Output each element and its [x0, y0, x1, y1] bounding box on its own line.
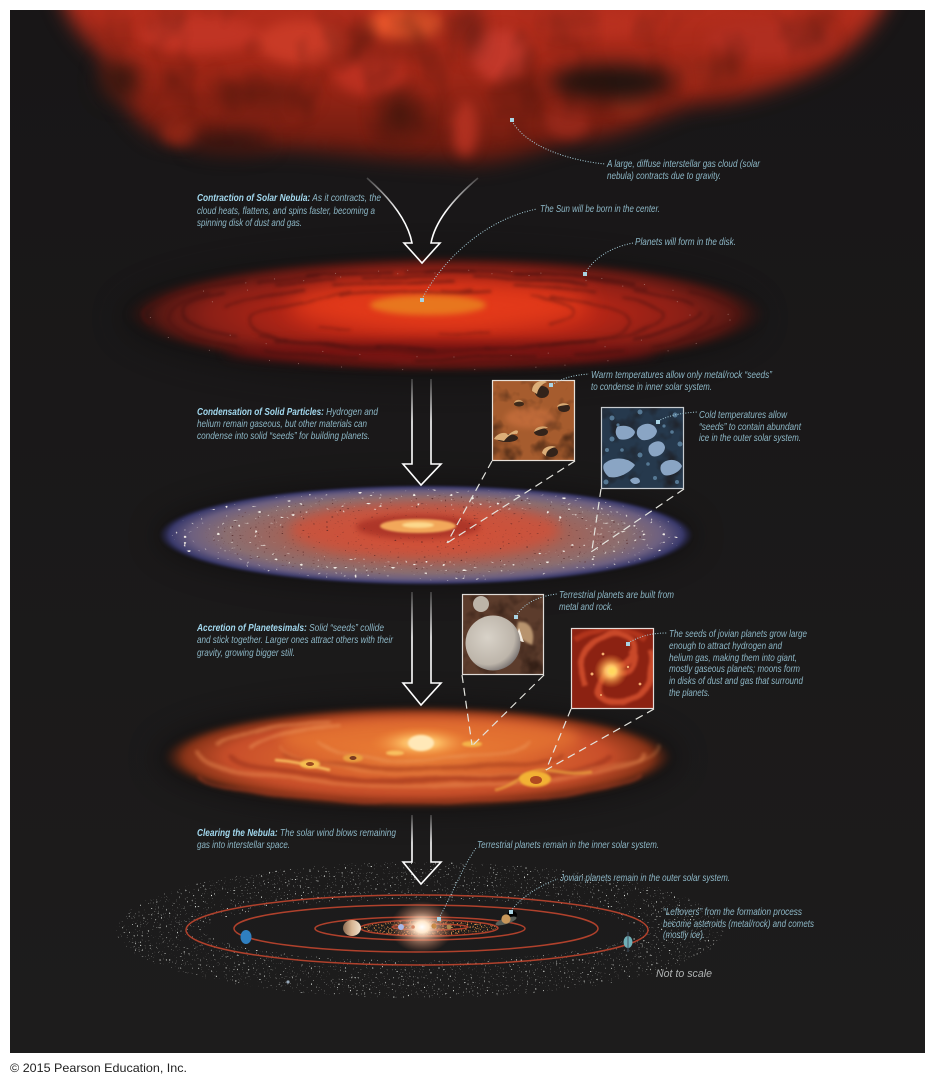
shadow halo behind disk one: [120, 254, 760, 382]
text block: contraction of solar nebula: spinning disk of dust and gas.: [197, 218, 302, 229]
disk faint specks: [150, 270, 730, 370]
text block: clearing the nebula: [197, 828, 396, 851]
copyright: © 2015 Pearson Education, Inc.: [10, 1061, 187, 1075]
leader: gas cloud: [510, 118, 605, 164]
text block: contraction of solar nebula: Contraction of Solar Nebula: As it contracts, the: [197, 193, 381, 204]
caption: leftovers: [663, 907, 814, 941]
text block: condensation of solid particles: Condensation of Solid Particles: Hydrogen and: [197, 407, 378, 418]
leader: jovian seeds: [626, 633, 667, 646]
leader: jovian remain: [509, 879, 558, 914]
leader: terrestrial remain: [437, 848, 476, 921]
inner planets: [398, 923, 451, 930]
inset: cold icy seeds: [601, 407, 684, 489]
text block: accretion of planetesimals: and stick together. Larger ones attract others with their: [197, 635, 393, 646]
text block: contraction of solar nebula: [197, 193, 381, 229]
text block: accretion of planetesimals: gravity, growing bigger still.: [197, 648, 295, 659]
zoom lines: terrestrial inset: [462, 675, 544, 746]
central glow: [369, 726, 473, 760]
inner asteroid belt: [360, 920, 498, 936]
illustration: cleared solar system: [116, 862, 724, 998]
planet: uranus: [624, 932, 632, 952]
planet: neptune: [240, 930, 252, 944]
asteroid and comet scatter: [116, 862, 724, 998]
illustration: diffuse interstellar gas cloud: [58, 0, 892, 163]
text block: clearing the nebula: Clearing the Nebula: The solar wind blows remaining: [197, 828, 396, 839]
note: not to scale: Not to scale: [656, 968, 712, 980]
protoplanet spot left: [275, 760, 330, 770]
leader: terrestrial planets: [514, 594, 557, 619]
zoom lines: jovian inset: [546, 709, 654, 770]
zoom lines: warm inset: [447, 461, 575, 543]
caption: terrestrial planets: Terrestrial planets are built from: [559, 590, 674, 601]
impact plume: [516, 622, 533, 645]
ring bands: [196, 722, 660, 801]
inset: warm metal rock seeds: [492, 380, 575, 461]
illustration: disk with accreting planetesimals: [164, 707, 672, 807]
terrestrial protoplanet spot: [386, 741, 482, 756]
caption: cold seeds: “seeds” to contain abundant: [699, 422, 802, 433]
shadow halo behind disk two: [156, 482, 696, 590]
jovian protoplanet spot: [495, 770, 592, 790]
text block: condensation of solid particles: helium remain gaseous, but other materials can: [197, 419, 367, 430]
white seed dots: [168, 489, 684, 581]
large rocky body: [466, 616, 520, 670]
arrow: accretion: [403, 592, 441, 705]
caption: jovian planets: mostly gaseous planets; moons form: [669, 664, 800, 675]
text block: condensation of solid particles: condense into solid “seeds” for building planets.: [197, 431, 370, 442]
spiral arms: [575, 629, 652, 702]
planet orbits: [186, 895, 648, 965]
cloud dark pockets: [100, 4, 674, 152]
caption: planets in disk: Planets will form in the disk.: [635, 237, 736, 248]
shadow halo behind disk three: [156, 702, 680, 814]
caption: leftovers: (mostly ice).: [663, 930, 705, 941]
inset: terrestrial planetesimals: [462, 594, 544, 675]
caption: warm seeds: Warm temperatures allow only metal/rock “seeds”: [591, 370, 772, 381]
cloud bright billows: [140, 8, 835, 156]
caption: jovian planets: The seeds of jovian planets grow large: [669, 629, 807, 640]
illustration: disk with condensing seeds: [159, 485, 693, 585]
leader: planets in disk: [583, 243, 633, 276]
comet dot: [286, 980, 290, 984]
planet: jupiter: [343, 920, 361, 936]
sun: [390, 901, 454, 953]
text block: contraction of solar nebula: cloud heats, flattens, and spins faster, becoming a: [197, 206, 375, 217]
ice rocks: [603, 424, 682, 484]
protoplanet spot centre left: [343, 754, 363, 762]
dark dust specks: [205, 495, 645, 575]
caption: warm seeds: [591, 370, 772, 393]
text block: condensation of solid particles: [197, 407, 378, 442]
arrow: contraction: [367, 178, 478, 263]
caption: gas cloud: nebula) contracts due to gravity.: [607, 171, 721, 182]
caption: terrestrial planets: [559, 590, 674, 613]
ice droplets: [604, 410, 682, 484]
rock seeds: [494, 381, 570, 457]
caption: jovian planets: in disks of dust and gas that surround: [669, 676, 803, 687]
arrow: clearing: [403, 815, 441, 884]
caption: jovian remain: Jovian planets remain in the outer solar system.: [559, 873, 730, 884]
caption: terrestrial remain: Terrestrial planets remain in the inner solar system.: [477, 840, 659, 851]
caption: gas cloud: A large, diffuse interstellar gas cloud (solar: [606, 159, 760, 170]
caption: sun: The Sun will be born in the center.: [540, 204, 660, 215]
caption: jovian planets: [669, 629, 807, 699]
text block: accretion of planetesimals: [196, 623, 393, 659]
caption: leftovers: become asteroids (metal/rock) and comets: [663, 919, 814, 930]
text block: clearing the nebula: gas into interstellar space.: [197, 840, 290, 851]
caption: terrestrial planets: metal and rock.: [559, 602, 613, 613]
caption: jovian planets: enough to attract hydrogen and: [669, 641, 782, 652]
leader: warm seeds: [549, 374, 589, 387]
small rocky body: [473, 596, 489, 612]
planet: saturn: [495, 911, 517, 927]
illustration: contracting disk: [126, 256, 766, 372]
arrow: condensation: [403, 379, 441, 485]
caption: cold seeds: ice in the outer solar system.: [699, 433, 801, 444]
caption: leftovers: “Leftovers” from the formation process: [663, 907, 802, 918]
caption: cold seeds: Cold temperatures allow: [699, 410, 788, 421]
caption: warm seeds: to condense in inner solar system.: [591, 382, 712, 393]
caption: jovian planets: helium gas, making them into giant,: [669, 653, 797, 664]
inset: jovian protoplanet swirl: [571, 628, 654, 709]
leader: sun: [420, 209, 537, 302]
caption: jovian planets: the planets.: [669, 688, 710, 699]
text block: accretion of planetesimals: Accretion of Planetesimals: Solid “seeds” collide: [196, 623, 384, 634]
leader: cold seeds: [656, 412, 697, 424]
caption: cold seeds: [699, 410, 802, 444]
disk dark spiral bands: [144, 271, 736, 365]
caption: gas cloud: [606, 159, 760, 182]
zoom lines: cold inset: [591, 489, 684, 552]
